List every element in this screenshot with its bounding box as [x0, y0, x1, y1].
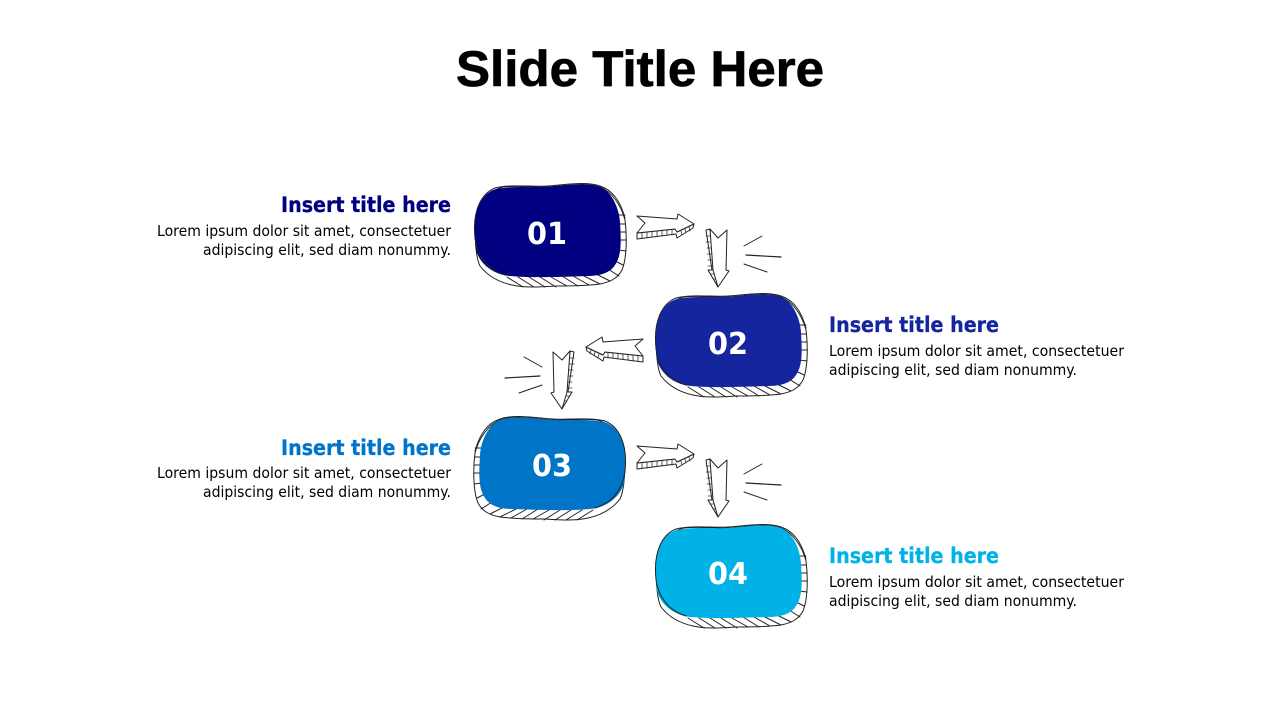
step 4 description: Lorem ipsum dolor sit amet, consectetuer	[829, 573, 1125, 591]
step 3 description: Lorem ipsum dolor sit amet, consectetuer	[157, 464, 452, 482]
step 1 description: Lorem ipsum dolor sit amet, consectetuer	[157, 222, 452, 240]
step 3 text block	[157, 436, 452, 501]
step 1 badge	[474, 184, 626, 287]
step 1 description: adipiscing elit, sed diam nonummy.	[203, 241, 451, 259]
accent lines near arrow 2	[505, 357, 542, 393]
step 1 text block	[157, 193, 452, 259]
step 4 heading: Insert title here	[829, 544, 999, 568]
step 4 text block	[829, 544, 1125, 610]
accent lines near arrow 3	[744, 464, 781, 500]
step 2 badge	[655, 294, 807, 397]
title: Slide Title Here	[456, 41, 824, 97]
step 4 description: adipiscing elit, sed diam nonummy.	[829, 592, 1077, 610]
arrow: 01 down to 02	[706, 229, 729, 287]
accent lines near arrow 1	[744, 236, 781, 272]
step 2 text block	[829, 313, 1125, 379]
step 2 heading: Insert title here	[829, 313, 999, 337]
step 3 description: adipiscing elit, sed diam nonummy.	[203, 483, 451, 501]
step 1 heading: Insert title here	[281, 193, 451, 217]
arrow: 03 right	[637, 444, 694, 469]
arrow: 02 left	[586, 337, 643, 362]
step 2 description: adipiscing elit, sed diam nonummy.	[829, 361, 1077, 379]
step 3 badge	[474, 417, 626, 520]
arrow: 02 down to 03	[551, 351, 574, 409]
number 03: 03	[532, 449, 572, 484]
arrow: 03 down to 04	[706, 459, 729, 517]
number 02: 02	[708, 327, 748, 362]
step 2 description: Lorem ipsum dolor sit amet, consectetuer	[829, 342, 1125, 360]
number 01: 01	[527, 217, 567, 252]
arrow: 01 right	[637, 214, 694, 239]
step 3 heading: Insert title here	[281, 436, 451, 460]
number 04: 04	[708, 557, 748, 592]
step 4 badge	[655, 525, 807, 628]
